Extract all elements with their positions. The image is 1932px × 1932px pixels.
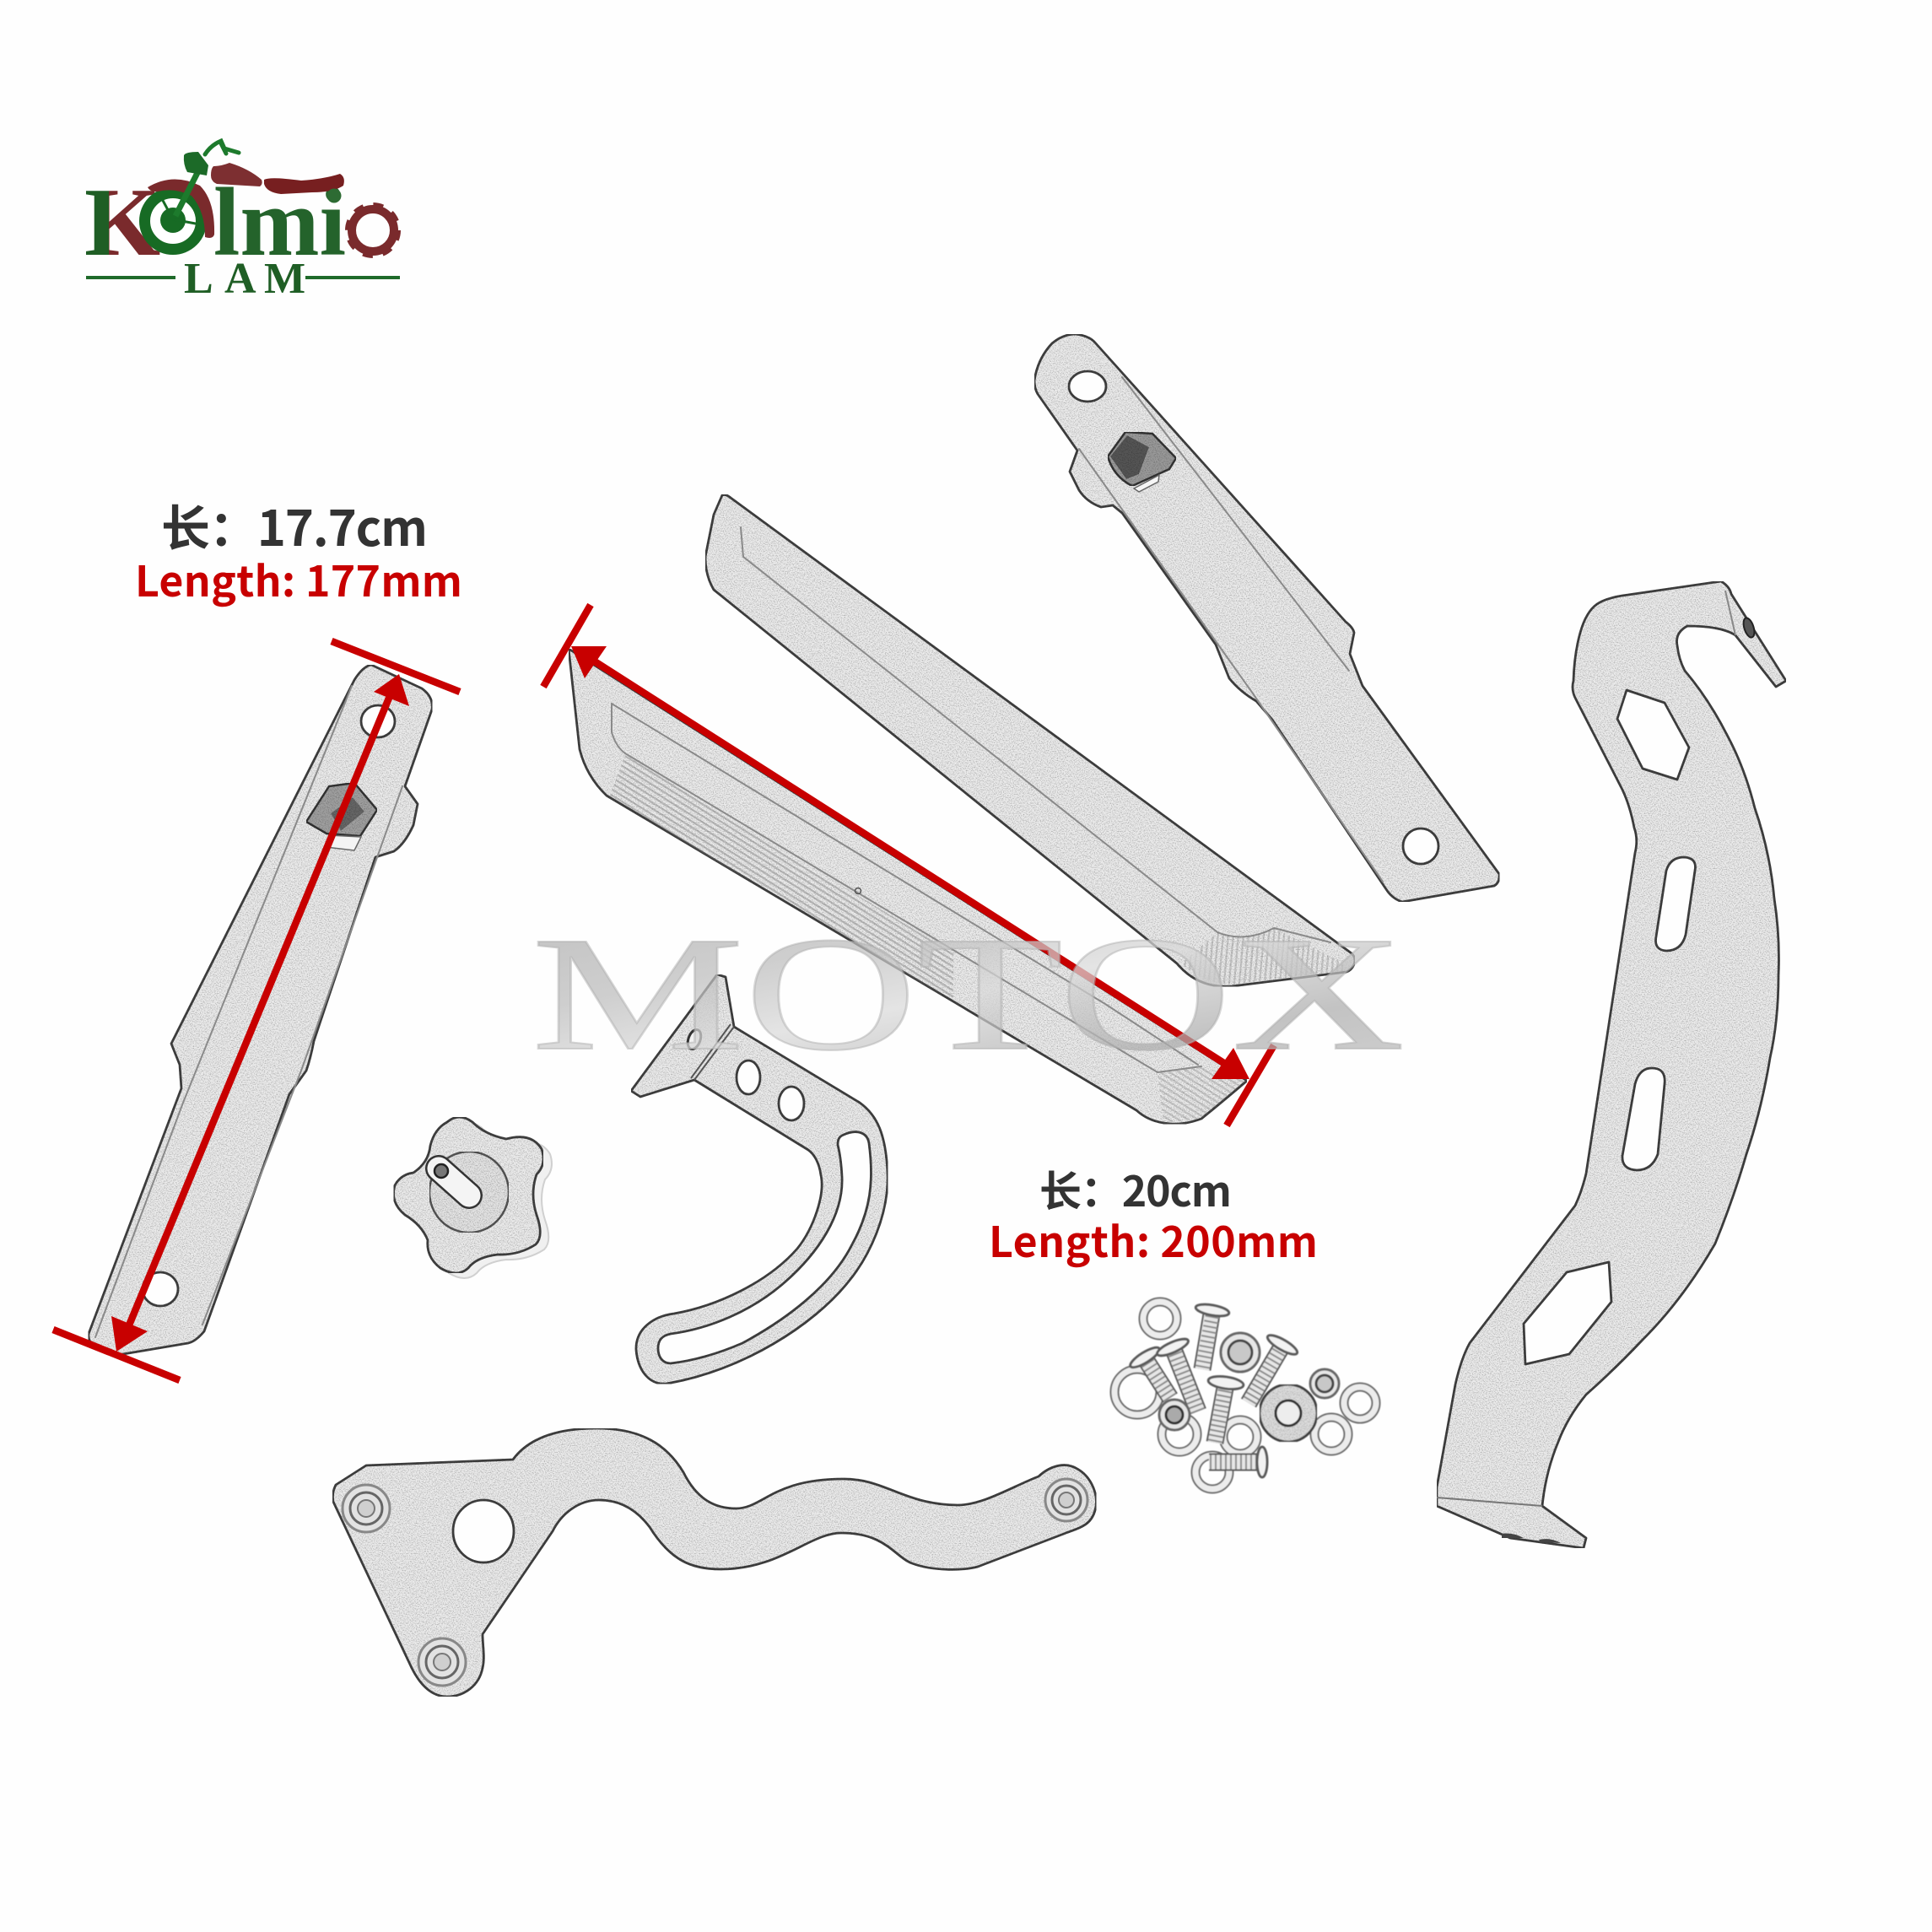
- top right bar slot patch: [1108, 432, 1176, 492]
- left tick: bottom: [53, 1330, 180, 1380]
- right bracket bottom tab holes: [1502, 1534, 1561, 1543]
- right dimension arrow: [543, 605, 1274, 1125]
- right tick: top: [543, 605, 591, 687]
- rivet: left: [343, 1485, 390, 1532]
- logo i dot: [327, 189, 341, 202]
- logo: Kolmio LAM: [84, 141, 400, 303]
- logo wordmark lmi: lmi: [213, 169, 346, 277]
- part: star knob: [393, 1117, 552, 1278]
- part: wavy bottom bracket: [332, 1428, 1096, 1697]
- logo motorcycle front wheel: [145, 192, 201, 250]
- left dimension arrow: [53, 641, 460, 1380]
- logo right rule: [305, 276, 400, 279]
- right arrow head: bottom: [1212, 1048, 1249, 1079]
- knob shadow: [449, 1122, 552, 1278]
- left arrow head: top: [374, 674, 409, 706]
- top plate body: [705, 494, 1355, 986]
- right bracket top fold: [1725, 591, 1735, 635]
- lower plate small dot: [855, 888, 861, 894]
- left tick: top: [332, 641, 460, 692]
- lower plate striped band: [609, 755, 953, 1001]
- rivet: right: [1045, 1479, 1087, 1521]
- top plate groove: [741, 527, 1330, 942]
- part: curved slotted bracket: [631, 974, 888, 1384]
- nuts: [1159, 1333, 1339, 1430]
- top right bar body: [1034, 334, 1499, 902]
- lower plate groove: [612, 704, 1201, 1072]
- rivet: bottom: [418, 1638, 466, 1686]
- left bar body: [89, 665, 432, 1355]
- right bracket top tab hole: [1741, 617, 1757, 639]
- logo motorcycle tank: [211, 163, 262, 186]
- lower plate body: [569, 649, 1247, 1124]
- wavy bracket body: [332, 1428, 1096, 1697]
- part: right curved bracket: [1437, 581, 1786, 1548]
- top plate end ribs: [1181, 928, 1346, 985]
- screws: [1128, 1303, 1299, 1477]
- logo motorcycle fender: [148, 179, 214, 238]
- knob body: [393, 1117, 543, 1273]
- part: top right bar: [1034, 334, 1499, 902]
- part: lower plate with measurement: [569, 649, 1247, 1124]
- curved bracket fold line: [691, 1024, 734, 1080]
- right tick: bottom: [1227, 1045, 1274, 1125]
- right arrow shaft: [588, 657, 1232, 1068]
- left arrow head: bottom: [111, 1316, 148, 1352]
- logo motorcycle seat: [264, 174, 344, 194]
- left bar slot patch: [306, 783, 377, 850]
- right label: Chinese length: 长：20cm: [1039, 1158, 1232, 1219]
- right arrow head: top: [571, 646, 607, 678]
- left label: English length: Length: 177mm: [135, 548, 462, 609]
- logo LAM: LAM: [184, 255, 305, 303]
- top right bar ridges: [1079, 377, 1383, 882]
- washers: [1114, 1302, 1376, 1489]
- big flat washer: [1260, 1384, 1317, 1442]
- curved bracket body: [631, 974, 888, 1384]
- part: left bar with measurement: [89, 665, 432, 1355]
- left label: Chinese length: 长：17.7cm: [161, 489, 428, 560]
- part: screws, nuts and washers: [1114, 1302, 1376, 1489]
- logo left rule: [86, 276, 175, 279]
- left arrow shaft: [127, 696, 390, 1331]
- logo wordmark K: K: [84, 169, 160, 277]
- lower plate end stripes: [1158, 1066, 1247, 1123]
- logo motorcycle fork and headlight: [175, 141, 239, 216]
- curved bracket tab hole: [685, 1028, 704, 1051]
- left bar ridges: [95, 686, 402, 1337]
- right bracket bottom fold: [1437, 1498, 1542, 1506]
- knob pin: [434, 1164, 469, 1195]
- watermark MOTOX: MOTOX: [532, 903, 1405, 1084]
- part: top plate: [705, 494, 1355, 986]
- right bracket body: [1437, 581, 1786, 1548]
- knob disc: [429, 1152, 509, 1233]
- logo gear: [348, 206, 398, 255]
- right label: English length: Length: 200mm: [989, 1209, 1318, 1270]
